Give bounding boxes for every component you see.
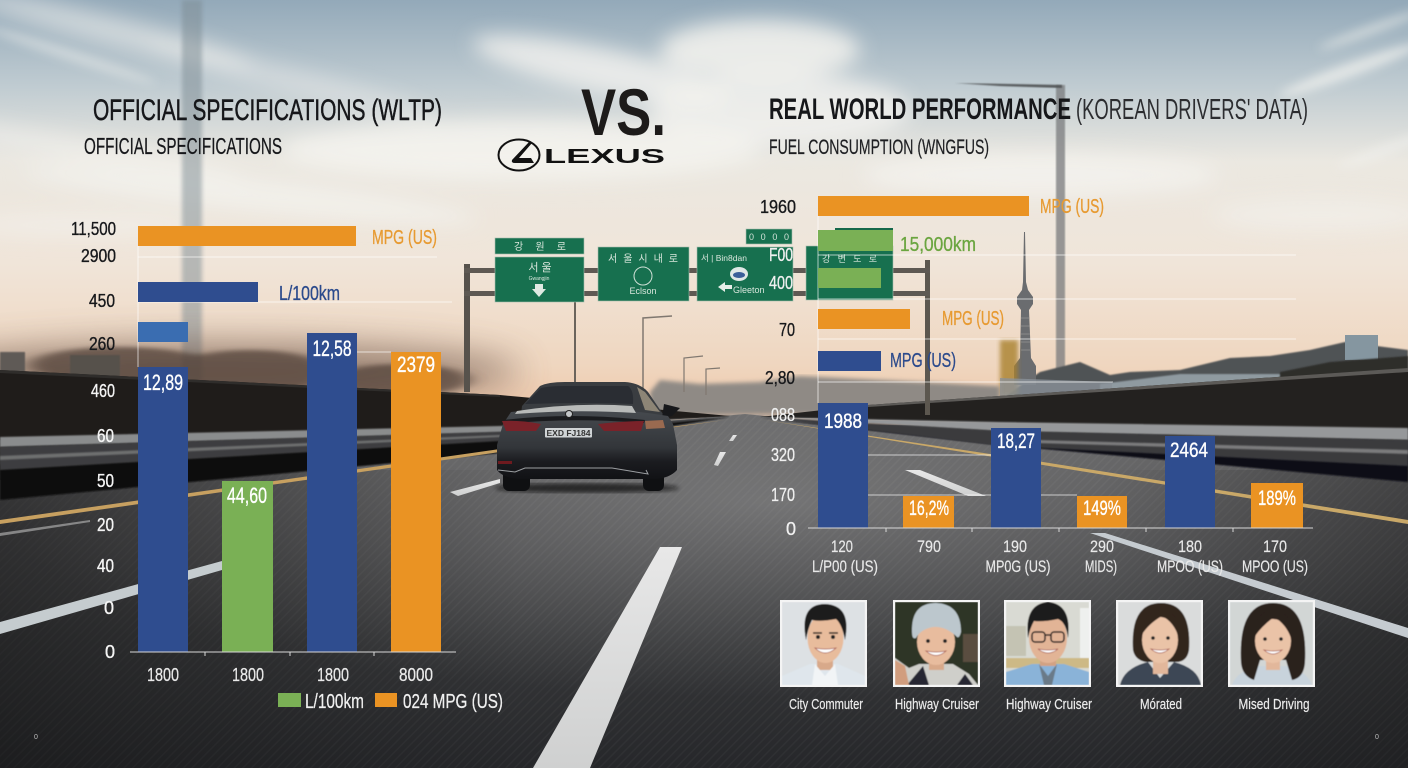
portrait: woman, long hair xyxy=(1228,600,1315,687)
chart: real world bars xyxy=(760,196,1313,576)
y axis labels, light: 170 xyxy=(771,485,795,505)
sign 3 xyxy=(697,247,793,301)
portrait: city commuter xyxy=(780,600,867,687)
rear window xyxy=(525,386,633,404)
Lexus sedan, rear view xyxy=(495,382,680,493)
sign 4: 강변도로 xyxy=(822,254,877,264)
horizontal bar labels: L/100km xyxy=(279,283,340,305)
left wall and guard rail xyxy=(0,370,730,536)
small sign xyxy=(746,229,792,244)
x axis: 1800 xyxy=(147,665,179,685)
bar values: 12,58 xyxy=(312,336,352,361)
horizontal bar labels: MPG (US) xyxy=(890,350,956,372)
bar values xyxy=(824,410,1296,520)
x axis: 190 xyxy=(1003,537,1027,556)
Lexus logo xyxy=(498,140,665,170)
sign 3: Gleeton xyxy=(733,285,765,295)
y axis labels, light: 20 xyxy=(97,515,114,535)
portrait: highway cruiser, headscarf xyxy=(893,600,980,687)
bar values: 2379 xyxy=(397,352,435,377)
sky with cloud wisps xyxy=(0,0,1408,425)
horizontal bar labels: MPG (US) xyxy=(1040,196,1104,218)
heading: real world performance: REAL WORLD PERFORMANCE xyxy=(769,93,1071,126)
x axis: MPOO (US) xyxy=(1242,557,1308,576)
portrait captions: City Commuter xyxy=(789,696,863,713)
legend: 024 MPG (US) xyxy=(403,691,503,713)
y axis labels, light: 50 xyxy=(97,471,114,491)
corner marks: 0 xyxy=(34,734,38,741)
corner marks: 0 xyxy=(1375,734,1379,741)
logo emblem xyxy=(498,140,540,170)
portrait captions xyxy=(789,696,1310,713)
x axis: MP0G (US) xyxy=(986,557,1050,576)
sub-heading: OFFICIAL SPECIFICATIONS xyxy=(84,133,282,159)
lane markings xyxy=(0,435,1408,768)
x axis: 8000 xyxy=(399,665,433,685)
heading: official specifications WLTP: OFFICIAL SPECIFICATIONS (WLTP) xyxy=(93,94,442,127)
x axis: MPOO (US) xyxy=(1157,557,1223,576)
bar values: 149% xyxy=(1083,497,1121,520)
x axis xyxy=(130,652,456,685)
horizontal bars xyxy=(138,226,356,342)
bar values: 18,27 xyxy=(997,430,1035,453)
portrait captions: Highway Cruiser xyxy=(895,696,979,713)
mirror xyxy=(662,404,680,418)
x axis: 170 xyxy=(1263,537,1287,556)
horizontal bar labels xyxy=(890,196,1104,372)
y axis labels, light: 0 xyxy=(786,519,796,539)
sign 1: 서 울 xyxy=(528,261,552,274)
right wall and guard rail xyxy=(760,368,1408,524)
y axis labels, light xyxy=(769,245,796,539)
x axis: 290 xyxy=(1090,537,1114,556)
y axis labels, light xyxy=(91,381,115,662)
bar values: 1988 xyxy=(824,410,862,433)
small sign: 0000 xyxy=(749,232,789,242)
horizontal bar labels: MPG (US) xyxy=(942,308,1004,330)
bar values: 44,60 xyxy=(227,483,267,508)
x axis: 120 xyxy=(831,537,853,556)
x axis: 1800 xyxy=(232,665,264,685)
sign 1: 강 원 로 xyxy=(514,241,566,253)
driver portraits xyxy=(780,600,1315,713)
side window xyxy=(637,387,660,412)
y axis labels, dark: 2,80 xyxy=(765,368,795,388)
y axis labels, light: 320 xyxy=(771,445,795,465)
y axis labels, light: 0 xyxy=(105,642,115,662)
bar values: 16,2% xyxy=(909,497,949,520)
road surface xyxy=(0,414,1408,768)
y axis labels, dark: 450 xyxy=(89,291,115,311)
y axis labels, light: 088 xyxy=(771,405,795,425)
sign 2: Eclson xyxy=(629,286,657,296)
y axis labels, light: F00 xyxy=(769,245,793,265)
horizontal bar labels: 15,000km xyxy=(900,234,976,256)
y axis labels, dark xyxy=(71,219,116,354)
legend xyxy=(278,691,503,713)
bar values: 12,89 xyxy=(143,370,183,395)
bar values: 189% xyxy=(1258,487,1296,510)
sign 2: 서울시내로 xyxy=(608,253,678,265)
horizontal bar labels xyxy=(279,227,437,305)
portrait captions: Highway Cruiser xyxy=(1006,696,1092,713)
sign 4 xyxy=(806,228,893,300)
y axis labels, dark: 2900 xyxy=(81,246,116,266)
bar values: 2464 xyxy=(1170,439,1208,462)
VS. heading: VS. xyxy=(581,75,666,149)
vertical bars xyxy=(818,403,1303,528)
vertical bars xyxy=(138,333,441,652)
sign 1 xyxy=(495,238,584,302)
x axis: 1800 xyxy=(317,665,349,685)
sub-heading: FUEL CONSUMPTION (WNGFUS) xyxy=(769,136,989,159)
y axis labels, dark: 260 xyxy=(89,334,115,354)
portrait: woman, bob hair xyxy=(1116,600,1203,687)
y axis labels, light: 0 xyxy=(104,598,114,618)
x axis xyxy=(808,528,1313,576)
portrait: highway cruiser, glasses xyxy=(1004,600,1091,687)
portrait captions: Mised Driving xyxy=(1238,696,1310,713)
sign 3: 서 | Bin8dan xyxy=(701,253,747,263)
Lexus logo: LEXUS xyxy=(544,146,665,168)
bar values xyxy=(143,336,435,508)
sign 2 xyxy=(598,247,689,301)
x axis: 180 xyxy=(1178,537,1202,556)
horizontal bar labels: MPG (US) xyxy=(372,227,437,249)
y axis labels, dark: 11,500 xyxy=(71,219,116,239)
x axis: L/P00 (US) xyxy=(812,557,878,576)
overhead gantry with green road signs xyxy=(464,228,930,415)
corner marks xyxy=(34,734,1379,741)
sign 1: Gwangjin xyxy=(529,276,550,282)
chart: official specification bars xyxy=(71,219,503,713)
y axis labels, light: 60 xyxy=(97,426,114,446)
blurred streetlight poles xyxy=(182,0,1065,420)
left horizon: blurred trees and buildings xyxy=(0,344,520,400)
y axis labels, dark: 1960 xyxy=(760,197,796,217)
wheels xyxy=(503,465,664,491)
N Seoul tower and hills xyxy=(650,232,1408,416)
y axis labels, dark: 70 xyxy=(779,320,795,340)
y axis labels, light: 460 xyxy=(91,381,115,401)
Lexus sedan, rear view: EXD FJ184 xyxy=(547,428,591,438)
horizontal bars xyxy=(818,196,1029,371)
y axis labels, light: 400 xyxy=(769,273,793,293)
x axis: MIDS) xyxy=(1085,557,1117,576)
legend: L/100km xyxy=(305,691,364,713)
x axis: 790 xyxy=(917,537,941,556)
tail lights xyxy=(502,421,541,431)
panel: official specifications xyxy=(71,94,503,713)
portrait captions: Mórated xyxy=(1140,696,1182,713)
y axis labels, light: 40 xyxy=(97,556,114,576)
y axis labels, dark xyxy=(760,197,796,388)
